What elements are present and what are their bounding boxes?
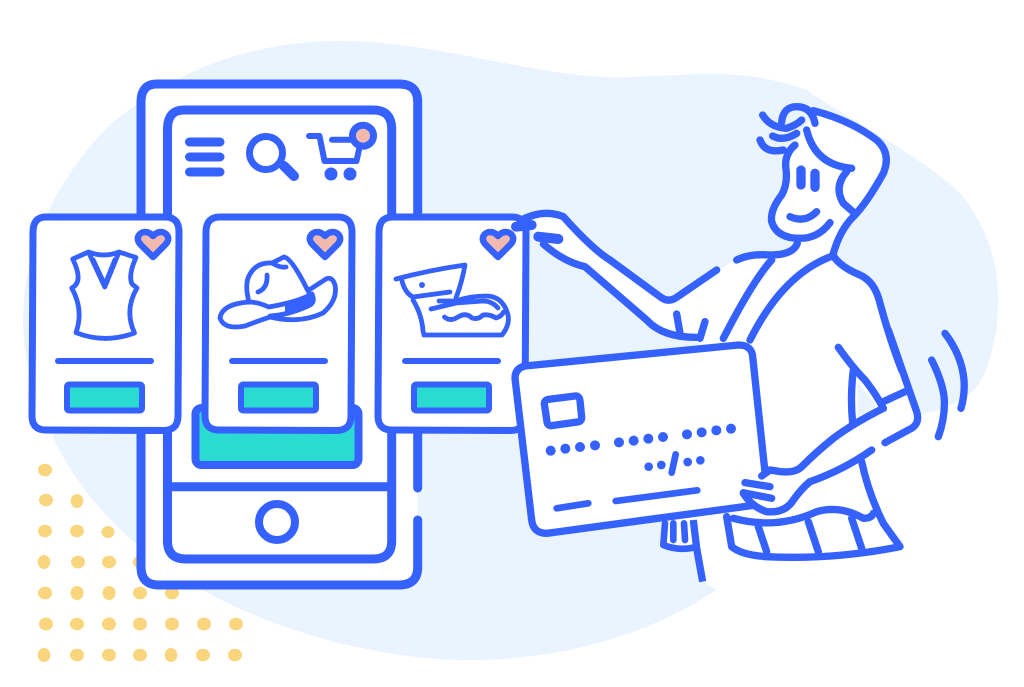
product card: hat — [205, 217, 352, 430]
sleeve fold — [838, 347, 883, 423]
smile — [790, 212, 817, 219]
shirt hem — [727, 462, 900, 557]
product card: shoe — [378, 217, 526, 430]
motion waves — [932, 333, 964, 437]
expiry slash and name lines — [557, 454, 697, 508]
home bar divider — [168, 482, 392, 491]
search icon — [250, 136, 294, 176]
armpit gap — [857, 382, 877, 417]
teal button — [414, 384, 489, 410]
phone body — [141, 84, 418, 585]
yellow dot pattern — [38, 464, 243, 662]
title line — [58, 358, 151, 364]
collar and shirt straps — [723, 243, 902, 370]
cart icon — [309, 125, 374, 180]
teal button — [67, 384, 142, 410]
title line — [405, 358, 498, 364]
home button — [259, 504, 295, 540]
large teal checkout button — [196, 408, 358, 465]
heart — [310, 232, 340, 257]
chip — [544, 396, 582, 426]
card body — [515, 345, 768, 533]
phone screen — [168, 110, 392, 559]
menu icon — [190, 142, 220, 172]
forearm upper — [762, 408, 883, 476]
phone — [141, 84, 418, 585]
hat icon — [220, 257, 336, 327]
heart — [138, 232, 168, 257]
hair — [760, 107, 852, 168]
shoe icon — [396, 265, 508, 335]
back and cuff — [883, 330, 918, 443]
pointing arm — [520, 213, 717, 338]
product card: top — [32, 217, 179, 430]
title line — [232, 358, 325, 364]
person white fill — [520, 110, 918, 590]
holding hand — [742, 472, 802, 513]
teal button — [241, 384, 316, 410]
bicep and back — [663, 330, 918, 582]
heart — [483, 232, 513, 257]
credit card — [515, 345, 833, 533]
hand fingers — [516, 225, 558, 239]
eyes — [801, 170, 815, 187]
leg — [663, 523, 697, 549]
shirt icon — [72, 252, 137, 338]
person — [516, 107, 918, 590]
head and neck — [771, 111, 886, 253]
card number dots — [546, 424, 736, 471]
forearm lower and hand — [743, 450, 872, 512]
